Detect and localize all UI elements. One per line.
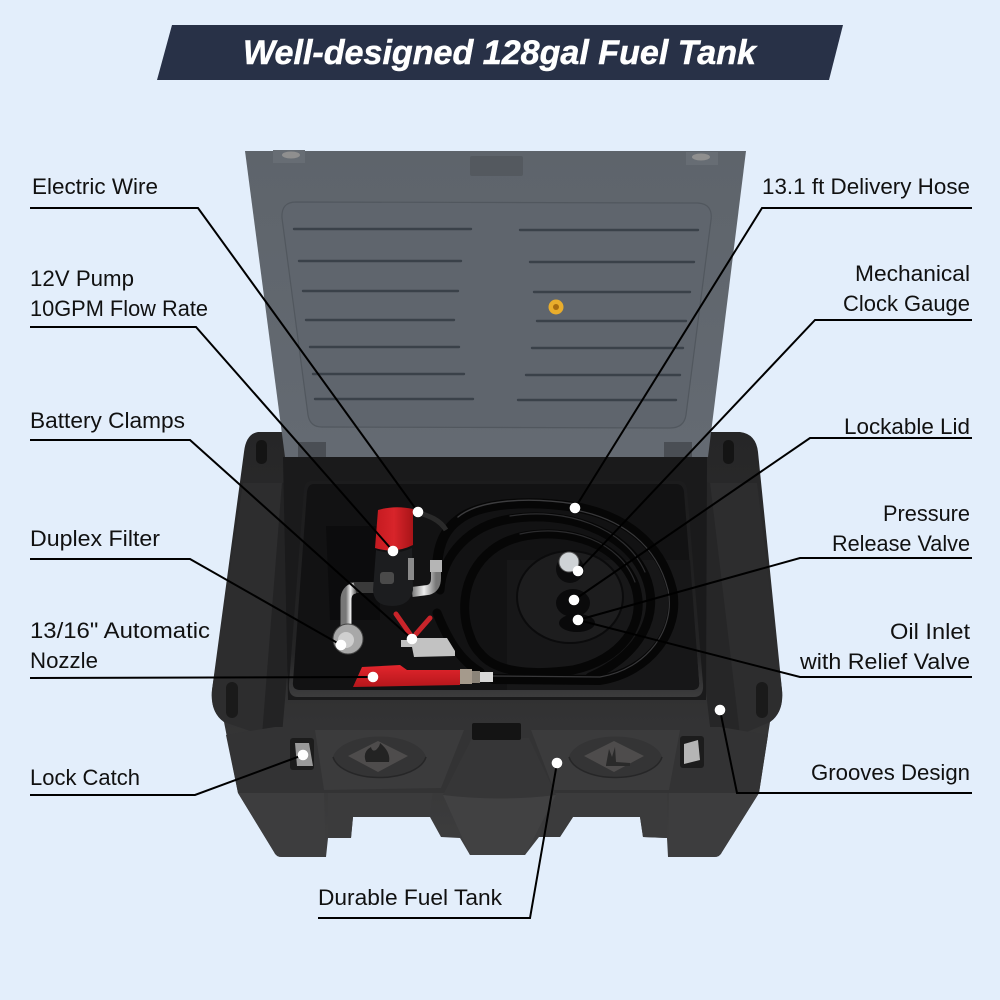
inner lid panel: [282, 202, 711, 428]
label: lockable lid: Lockable Lid: [844, 414, 970, 439]
right hazard disc: [569, 736, 662, 778]
interior well: [283, 457, 707, 700]
flame diamond sign: [348, 741, 408, 772]
tray raised dome: [517, 551, 623, 643]
left hinge screw: [273, 150, 305, 163]
gauge and valves: [556, 552, 595, 632]
label: 12V pump: 10GPM Flow Rate: [30, 296, 208, 321]
left hazard disc: [333, 736, 426, 778]
outlet nut: [430, 560, 442, 572]
upper right grip: [723, 440, 734, 464]
tray: [293, 484, 699, 690]
open lid: [245, 150, 746, 457]
label: mechanical clock gauge: [843, 261, 970, 316]
filter nut: [338, 632, 354, 648]
label: pressure release valve: [832, 501, 970, 556]
12V pump assembly: [333, 507, 455, 657]
label: lock catch: Lock Catch: [30, 765, 140, 790]
tray rim: [289, 481, 703, 697]
gauge base: [556, 555, 584, 583]
left groove band: [262, 477, 304, 735]
leader lines: [30, 208, 972, 918]
left lock catch: [290, 738, 314, 770]
tray inner step: [326, 526, 380, 620]
label: oil inlet: with Relief Valve: [799, 649, 970, 674]
filter pipe: [346, 588, 355, 638]
centre front panel: [443, 738, 556, 798]
callout dots: [298, 503, 725, 768]
left front panel: [315, 730, 464, 790]
label: 12V pump: [30, 266, 208, 321]
label: grooves design: Grooves Design: [811, 760, 970, 785]
pump motor: [375, 507, 413, 550]
left lid hinge: [298, 442, 326, 457]
fuel tank body: [212, 432, 782, 857]
label: automatic nozzle: [30, 618, 210, 673]
front band: [226, 727, 768, 793]
title banner: Well-designed 128gal Fuel Tank: [243, 34, 758, 72]
pump side valve: [380, 572, 394, 584]
latch recess: [472, 723, 521, 740]
right lid hinge: [664, 442, 692, 457]
electric wire: [416, 512, 446, 530]
clamp bracket: [401, 638, 455, 657]
lid handle: [470, 156, 523, 176]
lockable lid cap: [556, 589, 590, 617]
tray right basin: [507, 560, 699, 690]
right grip: [756, 682, 768, 718]
battery clamps: [396, 614, 430, 634]
yellow plug: [548, 300, 564, 314]
centre foot: [443, 795, 556, 855]
filter flange: [333, 624, 363, 654]
delivery nozzle: [353, 665, 493, 687]
label: pressure release valve: Pressure: [883, 501, 970, 526]
pump housing: [373, 548, 413, 606]
lid ribs: [294, 229, 698, 400]
right shoulder step: [710, 483, 782, 735]
lower skirt shading: [238, 790, 759, 857]
hose coil: [437, 500, 673, 680]
label: delivery hose: 13.1 ft Delivery Hose: [762, 174, 970, 199]
right lock catch: [680, 736, 704, 768]
title banner: [157, 25, 843, 80]
mechanical clock gauge: [559, 552, 579, 572]
label: battery clamps: Battery Clamps: [30, 408, 185, 433]
left grip: [226, 682, 238, 718]
label: mechanical clock gauge: Clock Gauge: [843, 291, 970, 316]
outlet elbow: [412, 566, 436, 592]
label: mechanical clock gauge: Mechanical: [855, 261, 970, 286]
right hinge screw: [686, 152, 718, 165]
environment diamond sign: [584, 741, 644, 772]
upper left grip: [256, 440, 267, 464]
pump bracket: [408, 558, 414, 580]
tank silhouette: [212, 432, 782, 857]
label: electric wire: Electric Wire: [32, 174, 158, 199]
underside recess: [328, 790, 667, 838]
label: automatic nozzle: 13/16" Automatic: [30, 618, 210, 643]
label: pressure release valve: Release Valve: [832, 531, 970, 556]
relief valve cap: [559, 614, 595, 632]
label: durable fuel tank: Durable Fuel Tank: [318, 885, 503, 910]
left shoulder step: [212, 483, 282, 735]
right groove band: [681, 477, 740, 735]
label: duplex filter: Duplex Filter: [30, 526, 161, 551]
inlet arm: [350, 582, 378, 593]
label: automatic nozzle: Nozzle: [30, 648, 98, 673]
label: oil inlet: [799, 619, 971, 674]
label: 12V pump: 12V Pump: [30, 266, 134, 291]
lid plate: [245, 151, 746, 457]
label: oil inlet: Oil Inlet: [890, 619, 971, 644]
right front panel: [531, 730, 680, 790]
